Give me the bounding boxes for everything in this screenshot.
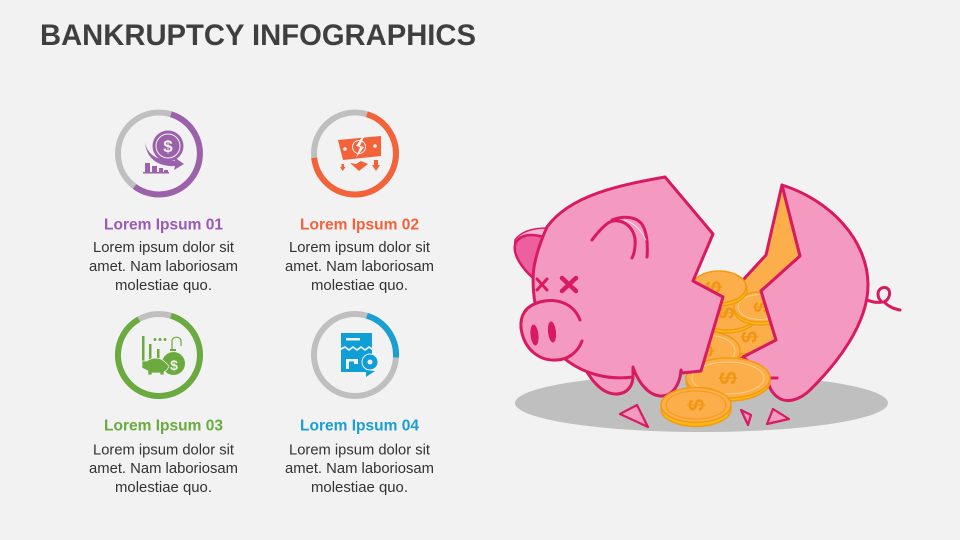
ring 01: [118, 112, 200, 194]
pig back leg: [587, 372, 633, 394]
coin front: [661, 388, 731, 426]
pig tail: [865, 287, 900, 310]
text 01: Lorem ipsum dolor sit: [93, 240, 234, 256]
text 02: [285, 240, 434, 294]
coin back right: $: [751, 301, 773, 313]
pig front half: [521, 177, 723, 396]
text 04: Lorem ipsum dolor sit: [289, 442, 430, 458]
ring 03: [118, 314, 200, 396]
icon: falling dollar coin: [143, 130, 184, 174]
text 02: amet. Nam laboriosam: [285, 259, 434, 275]
text 02: Lorem ipsum dolor sit: [289, 240, 430, 256]
text 03: [89, 442, 238, 496]
heading 02: Lorem Ipsum 02: [300, 216, 419, 234]
ground shadow: [515, 374, 888, 432]
shell shards: [620, 405, 789, 427]
text 03: Lorem ipsum dolor sit: [93, 442, 234, 458]
pig eyes crossed: [537, 278, 576, 291]
text 01: amet. Nam laboriosam: [89, 259, 238, 275]
text 02: molestiae quo.: [311, 278, 408, 294]
icon: falling dollar coin: $: [163, 137, 173, 156]
text 04: amet. Nam laboriosam: [285, 461, 434, 477]
text 01: [89, 240, 238, 294]
pig rear half: [743, 185, 868, 401]
title: BANKRUPTCY INFOGRAPHICS: [40, 19, 476, 52]
coin front: $: [684, 399, 709, 411]
coin large lower: [686, 358, 770, 401]
text 04: molestiae quo.: [311, 480, 408, 496]
coin pile behind: [678, 271, 786, 373]
pig nostrils: [529, 321, 557, 346]
icon: torn banknote: [338, 136, 381, 171]
text 03: molestiae quo.: [115, 480, 212, 496]
text 01: molestiae quo.: [115, 278, 212, 294]
coin back lower right: $: [737, 331, 762, 343]
orange shell interior: [700, 185, 800, 370]
text 03: amet. Nam laboriosam: [89, 461, 238, 477]
icon: piggy bank and money bag: $: [170, 357, 178, 373]
coin large lower: $: [715, 371, 742, 385]
pig ear: [515, 228, 547, 278]
coin back left: $: [714, 307, 739, 319]
icon: piggy bank and money bag: [142, 336, 185, 375]
panel: item 01: [89, 112, 238, 294]
coin top: $: [701, 281, 726, 293]
text 04: [285, 442, 434, 496]
ring 02: [314, 112, 396, 194]
icon: certificate document: [341, 333, 378, 377]
panel: item 03: [89, 314, 238, 496]
ring 04: [314, 314, 396, 396]
heading 03: Lorem Ipsum 03: [104, 418, 223, 434]
illustration: broken piggy bank: [515, 177, 900, 432]
panel: item 02: [285, 112, 434, 294]
coin middle: $: [693, 345, 718, 357]
heading 04: Lorem Ipsum 04: [300, 418, 419, 434]
panel: item 04: [285, 314, 434, 496]
heading 01: Lorem Ipsum 01: [104, 216, 223, 234]
